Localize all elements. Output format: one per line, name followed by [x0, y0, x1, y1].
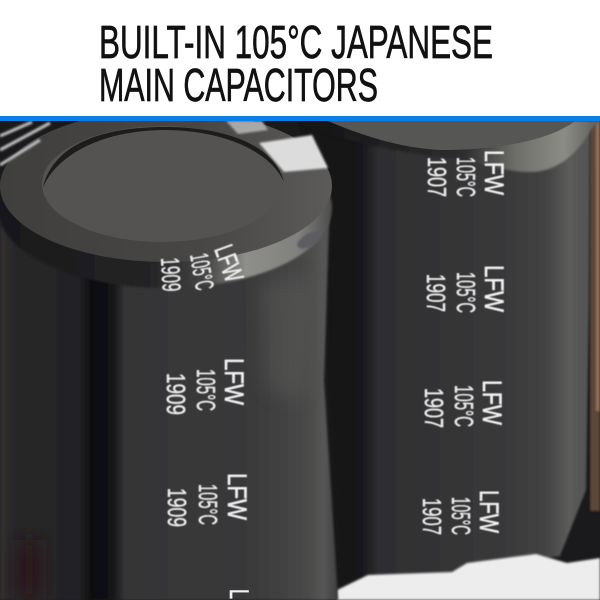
metal stripes top left: [0, 122, 50, 165]
markings: right capacitor, row 3: 1907: [419, 388, 449, 428]
white cloth at bottom: [337, 554, 600, 600]
disc shadow edge: [43, 127, 284, 187]
markings: left capacitor, shoulder: [160, 243, 245, 292]
left capacitor top disc: [42, 126, 236, 242]
right capacitor top disc: [328, 121, 575, 150]
markings: left capacitor, row 3: 1909: [162, 488, 192, 527]
markings: right capacitor, row 2: LFW: [479, 265, 509, 312]
markings: right capacitor, row 1: 1907: [422, 157, 452, 197]
markings: right capacitor, row 1: 105°C: [451, 157, 481, 197]
markings: left capacitor, row 3: 105°C: [193, 484, 223, 525]
markings: left capacitor, row 3: LFW: [222, 473, 252, 520]
markings: left capacitor, shoulder: 105°C: [184, 251, 220, 292]
right capacitor top rim: [370, 121, 600, 173]
white label patch: [259, 135, 328, 172]
shoulder glint: [296, 232, 316, 249]
left capacitor rounded shoulder: [0, 196, 333, 288]
markings: right capacitor, row 1: [422, 150, 509, 197]
markings: right capacitor, row 2: [421, 265, 509, 313]
markings: right capacitor, row 3: LFW: [477, 380, 507, 425]
markings: left capacitor, row 2: 1909: [161, 373, 191, 415]
markings: left capacitor, shoulder: 1909: [155, 257, 187, 292]
markings: right capacitor, row 4: LFW: [474, 490, 504, 533]
markings: left capacitor, row 3: [162, 473, 252, 527]
markings: right capacitor, row 3: [419, 380, 507, 428]
markings: right capacitor, row 4: 1907: [417, 498, 447, 535]
markings: right capacitor, row 3: 105°C: [449, 385, 479, 427]
white label marking: [226, 121, 268, 134]
copper wire at right edge: [590, 121, 600, 511]
reddish reflection lower left: [18, 540, 40, 600]
markings: right capacitor, row 4: [417, 490, 504, 535]
blue divider bar: [0, 116, 600, 121]
markings: right capacitor, row 2: 105°C: [451, 272, 481, 313]
left capacitor body: [0, 200, 338, 600]
left capacitor top ring: [0, 110, 332, 262]
markings: left capacitor, row 2: [161, 358, 249, 415]
left capacitor: [0, 110, 338, 600]
markings: left capacitor, row 2: LFW: [219, 358, 249, 405]
markings: right capacitor, row 2: 1907: [421, 274, 451, 312]
title: [99, 16, 493, 111]
markings: right capacitor, row 1: LFW: [479, 150, 509, 195]
markings: left capacitor, shoulder: LFW: [208, 241, 249, 286]
right capacitor: [300, 121, 600, 590]
markings: left capacitor, row 2: 105°C: [191, 369, 221, 411]
markings: right capacitor, row 4: 105°C: [446, 497, 476, 535]
title: MAIN CAPACITORS: [99, 59, 378, 111]
left capacitor side highlight: [265, 284, 302, 390]
